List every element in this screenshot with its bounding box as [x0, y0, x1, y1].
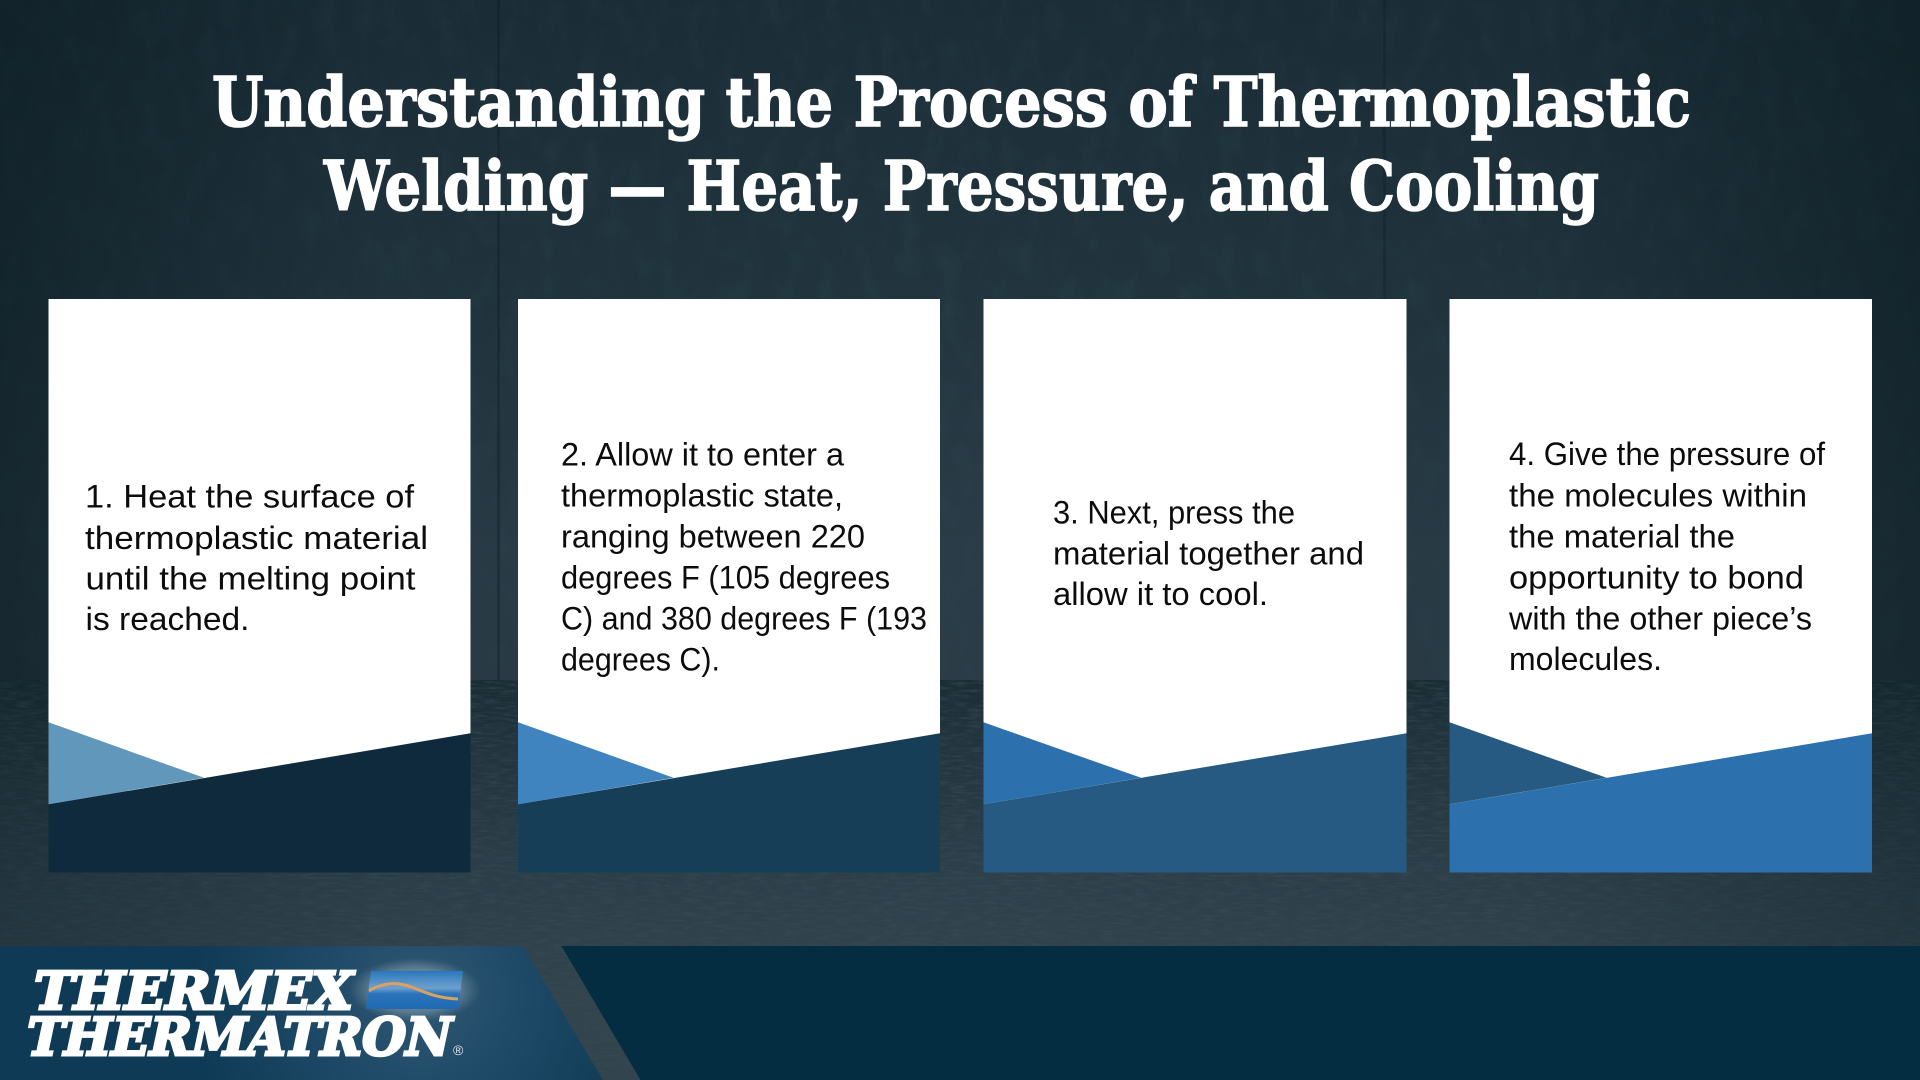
- accent triangle 1: [48, 722, 204, 804]
- step 1 text: thermoplastic material: [85, 520, 428, 556]
- accent triangle 4: [1450, 722, 1606, 804]
- logo wordmark: THERMEX: [27, 962, 359, 1022]
- background: concrete floor: [0, 680, 1920, 1080]
- accent triangle 3: [984, 722, 1141, 804]
- step 2 text: [561, 436, 927, 678]
- step 4 text: molecules.: [1509, 641, 1662, 677]
- step 1 text: is reached.: [86, 601, 250, 637]
- title: Welding — Heat, Pressure, and Cooling: [323, 147, 1599, 227]
- title: [212, 63, 1691, 227]
- step 2 text: ranging between 220: [561, 518, 865, 554]
- logo wordmark: [20, 962, 458, 1068]
- logo glow: [349, 958, 481, 1022]
- step 3 text: [1053, 494, 1364, 612]
- base shape 2: [518, 733, 940, 872]
- step 2 text: C) and 380 degrees F (193: [561, 600, 927, 636]
- step 3 text: 3. Next, press the: [1053, 494, 1295, 530]
- logo panel: [0, 946, 603, 1080]
- step 1 text: [85, 478, 428, 637]
- step 4 text: [1508, 436, 1826, 677]
- step 4 text: the material the: [1509, 518, 1735, 554]
- step 1 text: 1. Heat the surface of: [85, 478, 415, 514]
- panel: step 4 card: [1450, 299, 1872, 872]
- step 4 text: with the other piece’s: [1508, 600, 1812, 636]
- base shape 3: [984, 733, 1406, 872]
- logo registered mark: ®: [453, 1042, 464, 1058]
- title: Understanding the Process of Thermoplastic: [212, 63, 1691, 143]
- step 1 text: until the melting point: [86, 560, 416, 596]
- panel: step 1 card: [48, 299, 470, 872]
- step 2 text: 2. Allow it to enter a: [561, 436, 845, 472]
- base shape 1: [48, 733, 470, 872]
- base shape 4: [1450, 733, 1872, 872]
- step 3 text: material together and: [1053, 535, 1364, 571]
- step 4 text: 4. Give the pressure of: [1509, 436, 1826, 472]
- icon: wave flag: [366, 971, 463, 1009]
- accent triangle 2: [518, 722, 674, 804]
- step 2 text: degrees C).: [561, 642, 720, 678]
- panel: step 2 card: [518, 299, 940, 872]
- logo wordmark: THERMATRON: [20, 1008, 458, 1068]
- step 2 text: degrees F (105 degrees: [561, 560, 890, 596]
- step 3 text: allow it to cool.: [1053, 576, 1268, 612]
- footer band: [562, 946, 1920, 1080]
- step 4 text: opportunity to bond: [1509, 559, 1804, 595]
- step 2 text: thermoplastic state,: [561, 478, 843, 514]
- step 4 text: the molecules within: [1509, 478, 1807, 514]
- panel: step 3 card: [984, 299, 1406, 872]
- background: concrete wall: [0, 0, 1920, 690]
